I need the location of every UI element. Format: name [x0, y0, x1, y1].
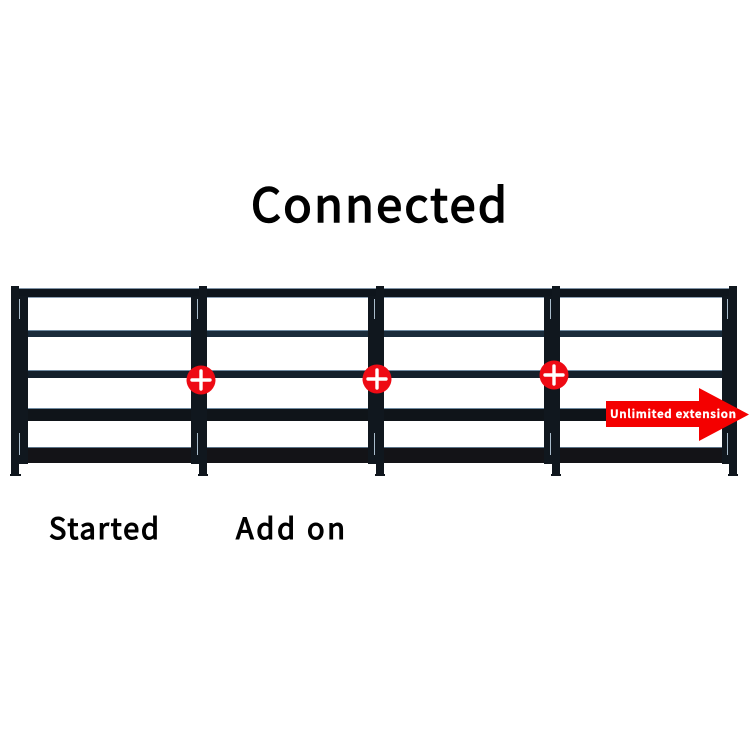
icon: plus connector 1 — [186, 366, 216, 394]
label: add on: Add on — [236, 506, 345, 548]
label: started: Started — [49, 506, 159, 548]
title: Connected — [251, 167, 507, 236]
shelving unit — [10, 286, 738, 476]
icon: plus connector 3 — [540, 360, 568, 390]
icon: plus connector 2 — [362, 364, 392, 394]
uprights — [10, 286, 738, 476]
arrow: unlimited extension — [606, 388, 749, 441]
upright highlights — [19, 299, 728, 455]
shelf beams — [15, 288, 733, 463]
arrow: unlimited extension: Unlimited extension — [610, 406, 736, 422]
